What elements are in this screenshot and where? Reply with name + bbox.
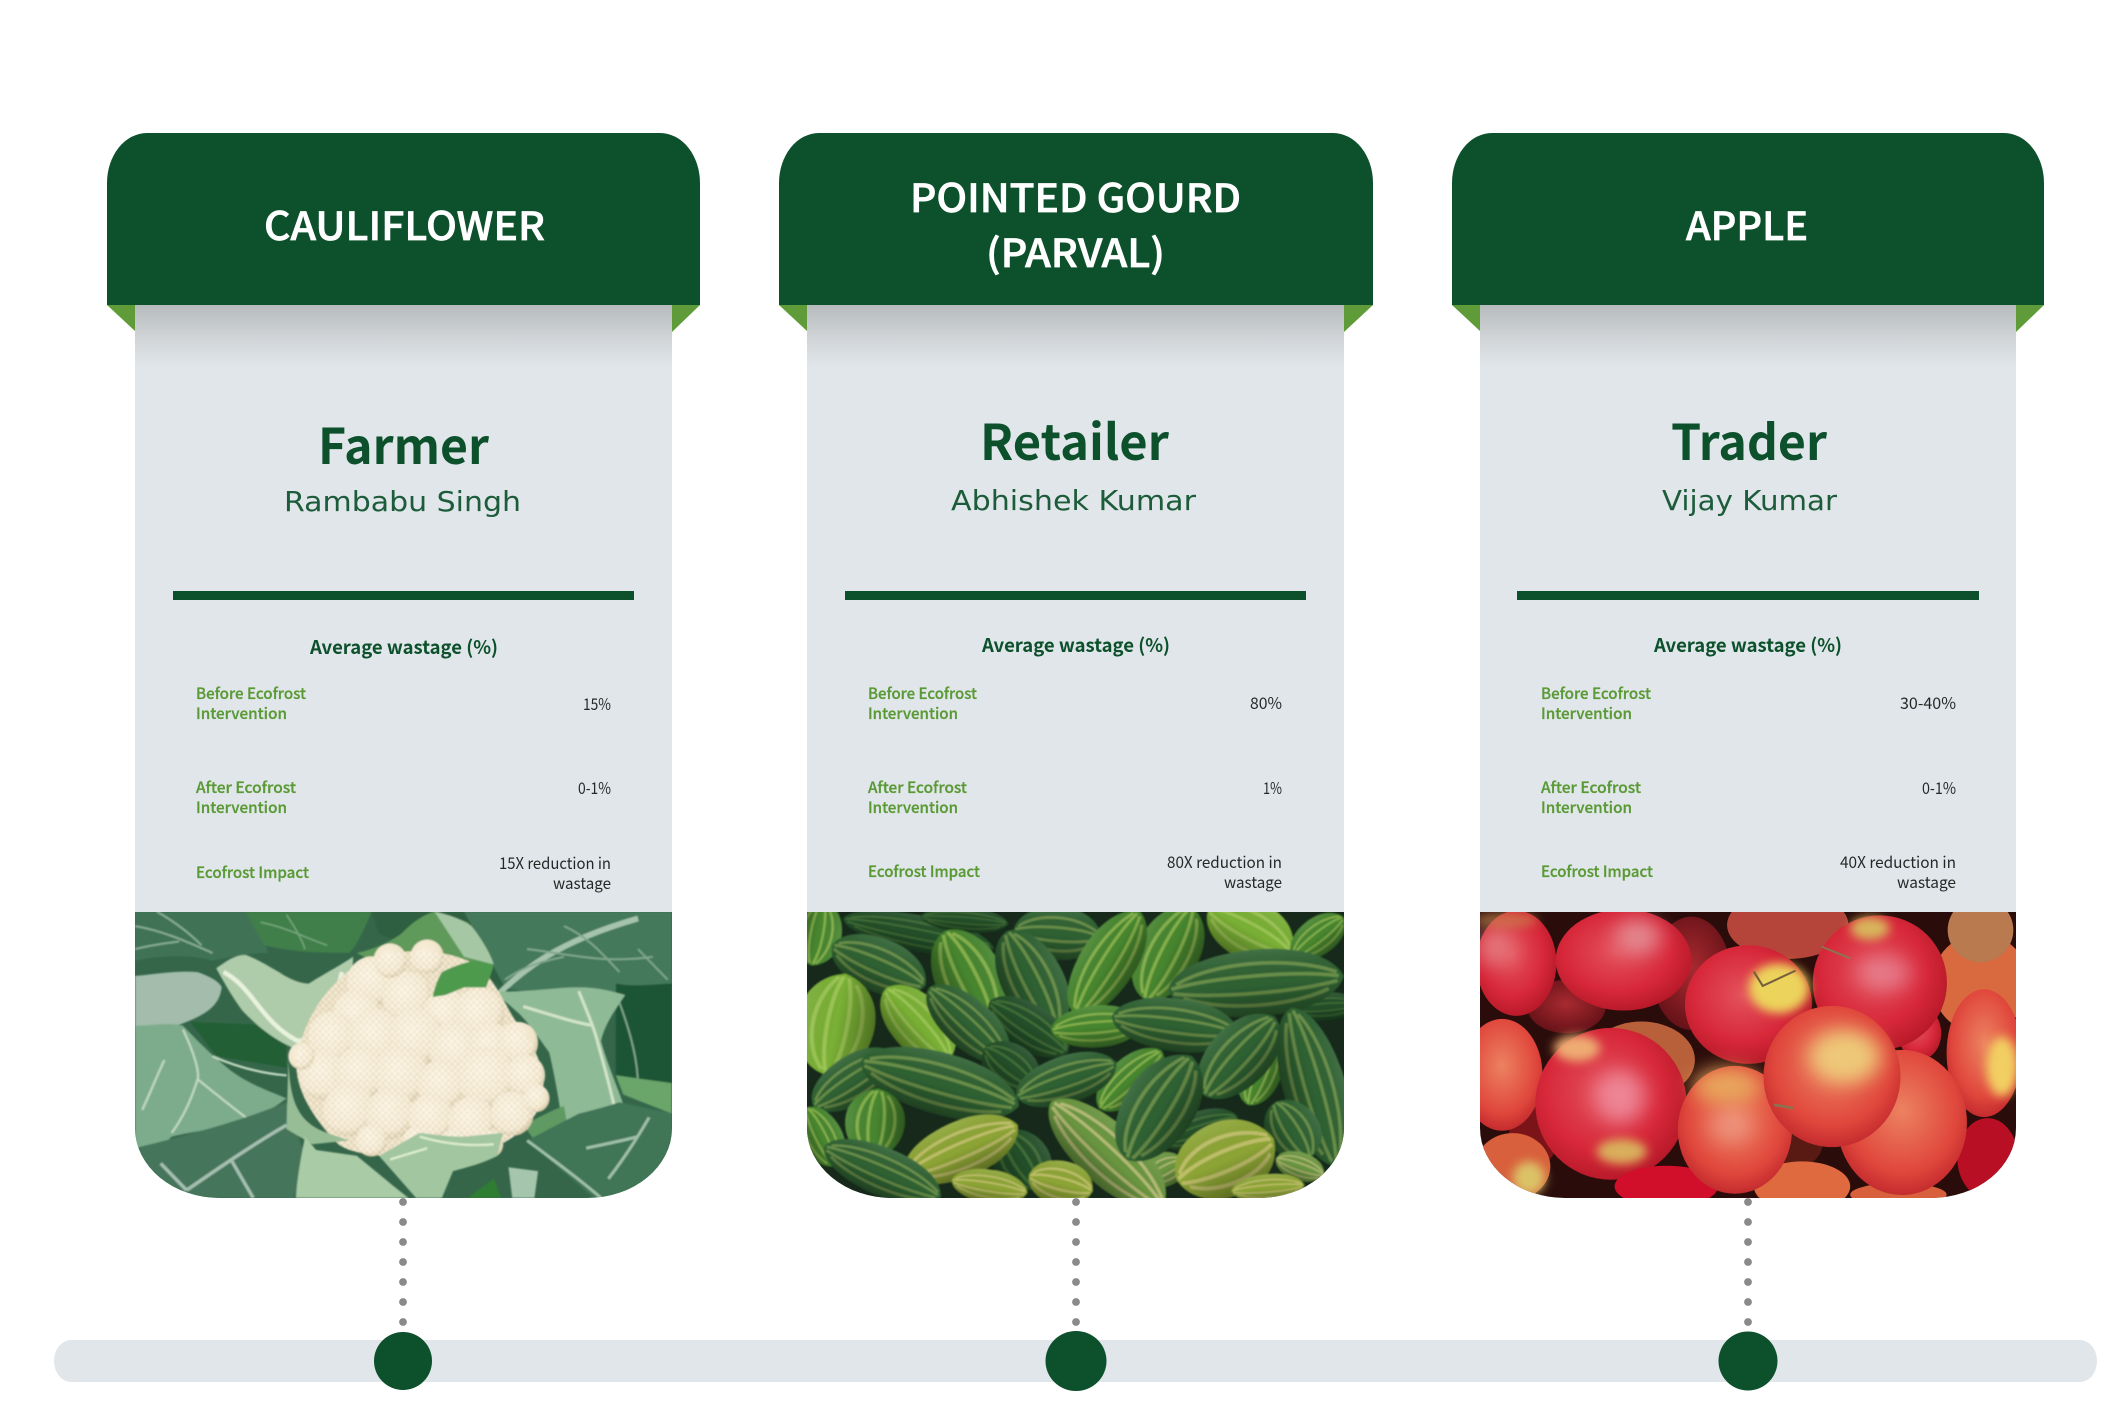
ribbon fold right [1344, 305, 1373, 332]
row: before: Before Ecofrost [868, 682, 977, 704]
photo: apples [1480, 912, 2016, 1198]
row: impact [196, 850, 611, 894]
row: after: After Ecofrost [868, 776, 967, 798]
row: impact: wastage [553, 870, 611, 894]
row: impact: Ecofrost Impact [868, 860, 980, 882]
card body [807, 305, 1344, 913]
role: farmer: Farmer [318, 408, 490, 479]
row: before: Before Ecofrost [196, 682, 306, 704]
ribbon fold left [1452, 305, 1480, 331]
heading: cauliflower: CAULIFLOWER [264, 196, 545, 252]
panel: apple card [1452, 133, 2044, 1211]
heading: pointed gourd [910, 168, 1241, 279]
row: after: 0-1% [578, 775, 611, 799]
person name: Rambabu Singh [284, 485, 521, 518]
row: after: After Ecofrost [196, 776, 296, 798]
card body [1480, 305, 2016, 913]
ribbon fold right [2016, 305, 2044, 332]
row: impact: 15X reduction in [499, 850, 611, 874]
row: before [1541, 682, 1956, 724]
header banner [779, 133, 1373, 305]
photo: pointed gourds [807, 912, 1344, 1198]
timeline marker: apple [1718, 1332, 1778, 1390]
photo: cauliflower [135, 912, 672, 1198]
header shadow [807, 305, 1344, 367]
row: after [1541, 775, 1956, 818]
row: impact [868, 849, 1282, 893]
row: before: Intervention [196, 702, 287, 724]
divider [173, 591, 634, 600]
wastage heading: Average wastage (%) [1653, 631, 1842, 658]
card body [135, 305, 672, 913]
row: impact: wastage [1224, 869, 1282, 893]
divider [1517, 591, 1979, 600]
row: impact: 40X reduction in [1840, 849, 1956, 873]
person name: Vijay Kumar [1662, 484, 1838, 517]
role: trader: Trader [1671, 404, 1828, 475]
connector: apple [1744, 1198, 1752, 1326]
row: after: Intervention [196, 796, 287, 818]
row: after: 0-1% [1922, 775, 1956, 799]
heading: pointed gourd: (PARVAL) [986, 223, 1165, 279]
timeline marker: pointed gourd [1046, 1331, 1106, 1391]
row: after: After Ecofrost [1541, 776, 1641, 798]
wastage heading: Average wastage (%) [981, 631, 1170, 658]
row: before: Before Ecofrost [1541, 682, 1651, 704]
heading: apple: APPLE [1686, 196, 1808, 252]
connector: pointed gourd [1072, 1198, 1080, 1326]
person name: Abhishek Kumar [951, 484, 1197, 517]
row: after: Intervention [868, 796, 958, 818]
header banner [1452, 133, 2044, 305]
row: before [196, 682, 611, 724]
row: impact: wastage [1897, 869, 1956, 893]
divider [845, 591, 1306, 600]
ribbon fold left [107, 305, 135, 331]
row: impact: 80X reduction in [1167, 849, 1282, 873]
row: after: Intervention [1541, 796, 1632, 818]
row: before: 30-40% [1900, 690, 1956, 714]
panel: pointed gourd card [779, 133, 1373, 1226]
row: before: Intervention [1541, 702, 1632, 724]
header shadow [135, 305, 672, 367]
row: after [868, 775, 1282, 818]
wastage heading: Average wastage (%) [309, 633, 498, 660]
timeline bar [54, 1340, 2097, 1382]
heading: pointed gourd: POINTED GOURD [910, 168, 1241, 224]
row: after [196, 775, 611, 818]
panel: cauliflower card [107, 133, 700, 1198]
row: before: Intervention [868, 702, 958, 724]
ribbon fold left [779, 305, 807, 331]
header banner [107, 133, 700, 305]
row: before: 80% [1250, 690, 1282, 714]
row: impact: Ecofrost Impact [196, 861, 309, 883]
ribbon fold right [672, 305, 700, 332]
row: after: 1% [1263, 775, 1282, 799]
role: retailer: Retailer [980, 404, 1170, 475]
timeline marker: cauliflower [374, 1332, 432, 1390]
row: impact: Ecofrost Impact [1541, 860, 1653, 882]
header shadow [1480, 305, 2016, 367]
connector: cauliflower [399, 1198, 407, 1326]
row: before [868, 682, 1282, 724]
row: before: 15% [583, 691, 611, 715]
row: impact [1541, 849, 1956, 893]
